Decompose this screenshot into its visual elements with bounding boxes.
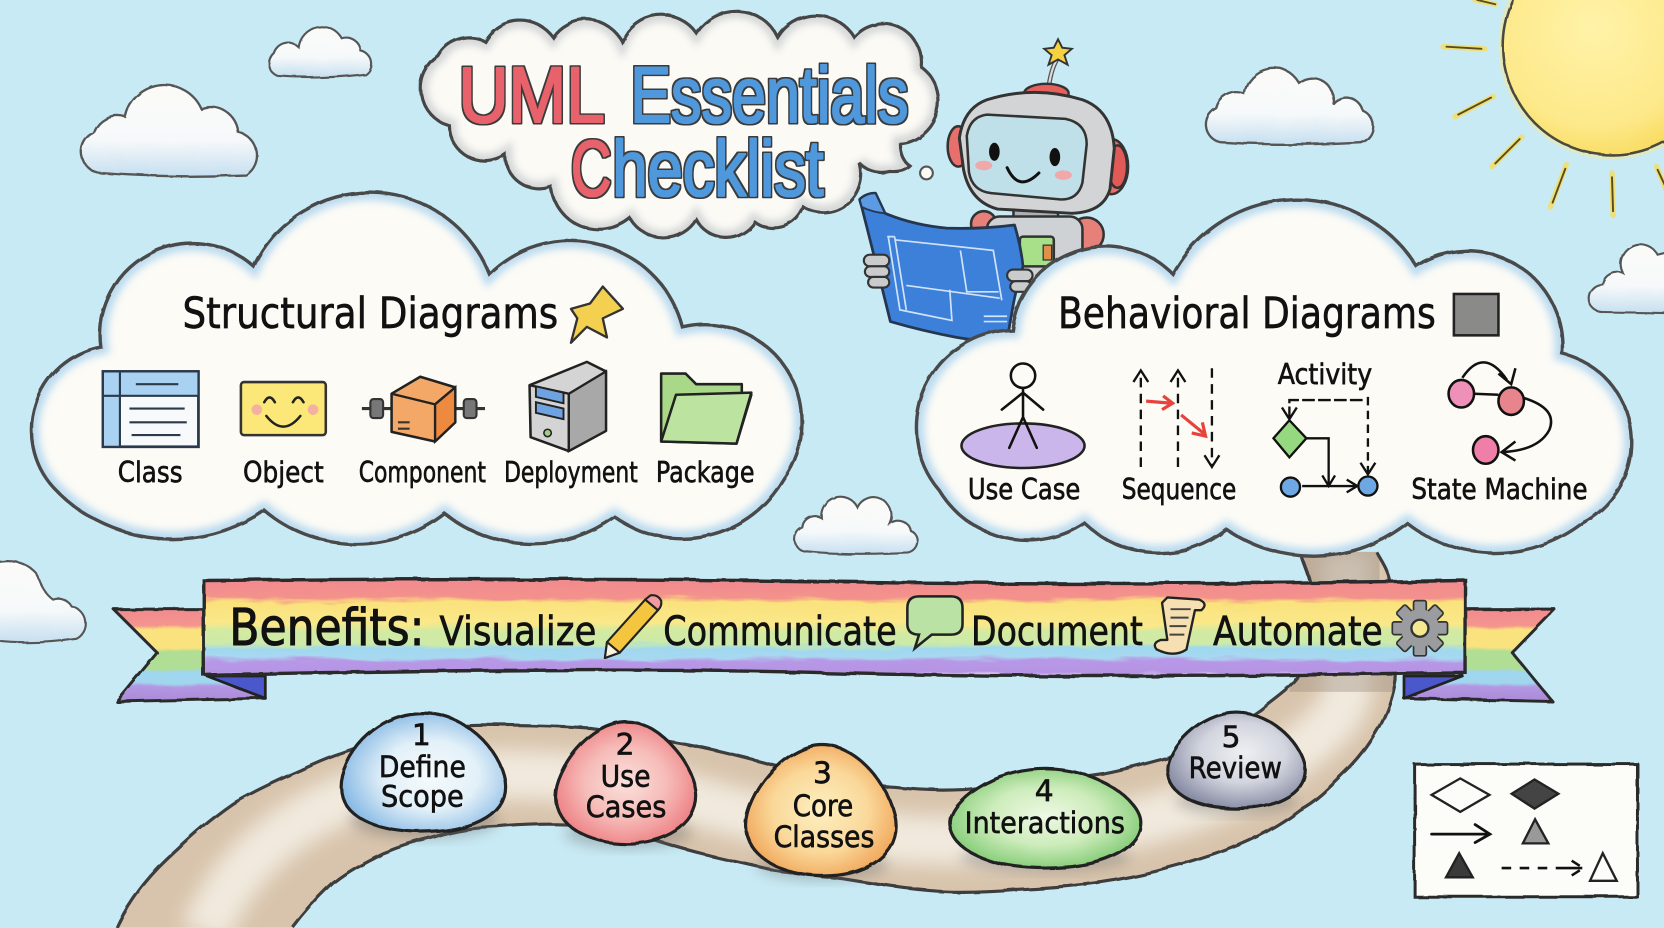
step stone 5: review: [1167, 712, 1305, 815]
winding road path: [117, 552, 1401, 928]
robot ears: [948, 126, 1128, 194]
title heading: C: [571, 124, 611, 212]
title heading: hecklist: [612, 124, 824, 212]
step stone 2: use cases: 2: [616, 728, 635, 763]
panel: title speech cloud: [421, 11, 938, 238]
step stone 3: core classes: [746, 745, 896, 881]
title heading: UML: [458, 51, 605, 139]
icon: document scroll: [1155, 597, 1205, 654]
small cloud upper left: [81, 85, 257, 176]
icon: speech bubble: [907, 596, 963, 648]
title heading: Essentials: [630, 51, 908, 139]
robot hands: [864, 255, 1033, 292]
icon: gear: [1392, 601, 1448, 656]
icon: package folder: [661, 374, 751, 444]
legend: filled diamond: [1512, 779, 1558, 809]
benefits text: Benefits:: [229, 599, 424, 658]
benefits text: Automate: [1213, 608, 1383, 655]
banner right tail: [1404, 609, 1555, 701]
small cloud top: [269, 26, 371, 78]
small cloud upper right: [1206, 68, 1373, 144]
label: class: Class: [118, 455, 183, 489]
step stone 3: core classes: Classes: [774, 820, 874, 855]
icon: object smiley: [241, 382, 326, 435]
icon: deployment server: [530, 362, 606, 451]
benefits text: [229, 599, 1383, 658]
robot mascot: [948, 39, 1128, 282]
benefits text: Communicate: [663, 608, 897, 655]
benefits rainbow banner: [201, 576, 1468, 679]
step stone 3: core classes: 3: [813, 756, 832, 791]
legend: gray triangle: [1523, 819, 1548, 843]
banner left tail: [114, 609, 265, 701]
icon: gold star: [571, 287, 623, 343]
step stone 1: define scope: [341, 713, 505, 838]
panel: structural diagrams cloud: [31, 193, 802, 544]
icon: component box with plugs: [362, 377, 485, 441]
panel: behavioral diagrams cloud: [916, 200, 1632, 556]
icon: activity diagram: [1273, 397, 1377, 497]
robot face screen: [967, 115, 1087, 200]
small cloud right edge: [1589, 245, 1664, 313]
behavioral heading: Behavioral Diagrams: [1058, 290, 1436, 339]
legend: open diamond: [1432, 778, 1489, 812]
title heading: [458, 51, 908, 212]
icon: class diagram: [103, 371, 198, 447]
step stone 4: interactions: 4: [1035, 774, 1054, 809]
legend: solid arrow: [1432, 825, 1490, 843]
structural heading: Structural Diagrams: [183, 290, 558, 339]
step stone 2: use cases: Cases: [586, 790, 666, 825]
step stone 1: define scope: Scope: [381, 780, 464, 815]
label: object: Object: [243, 455, 324, 489]
step stone 3: core classes: Core: [793, 789, 853, 824]
label: component: Component: [359, 455, 486, 489]
label: use case: Use Case: [968, 472, 1080, 506]
sun with rays: [1443, 0, 1664, 215]
robot antenna: [1024, 39, 1072, 103]
benefits text: Visualize: [439, 608, 596, 655]
benefits text: Document: [971, 608, 1143, 655]
small cloud center: [795, 497, 918, 554]
blueprint sheet held by robot: [860, 193, 1033, 340]
small cloud left edge: [0, 561, 86, 643]
icon: state machine: [1449, 362, 1551, 464]
step stone 4: interactions: Interactions: [965, 806, 1125, 841]
label: sequence: Sequence: [1122, 472, 1236, 506]
robot body: [971, 206, 1104, 282]
label: activity: Activity: [1278, 357, 1372, 391]
legend: open triangle: [1590, 853, 1617, 881]
step stone 5: review: Review: [1189, 751, 1282, 786]
legend: dashed arrow: [1502, 861, 1583, 876]
icon: sequence diagram: [1133, 368, 1219, 467]
legend box of UML symbols: [1415, 764, 1637, 897]
step stone 1: define scope: Define: [379, 750, 466, 785]
label: package: Package: [656, 455, 755, 489]
label: deployment: Deployment: [504, 455, 638, 489]
step stone 2: use cases: [555, 722, 696, 849]
step stone 4: interactions: [950, 768, 1141, 872]
step stone 1: define scope: 1: [412, 718, 431, 753]
step stone 5: review: 5: [1222, 720, 1240, 755]
icon: pencil: [605, 595, 661, 658]
thought bubble dot: [920, 167, 933, 179]
label: state machine: State Machine: [1411, 472, 1588, 506]
icon: use case stick figure: [961, 363, 1085, 468]
robot head: [959, 92, 1114, 213]
step stone 2: use cases: Use: [601, 759, 651, 794]
legend: dark triangle: [1446, 853, 1473, 877]
icon: gray square: [1454, 294, 1498, 335]
